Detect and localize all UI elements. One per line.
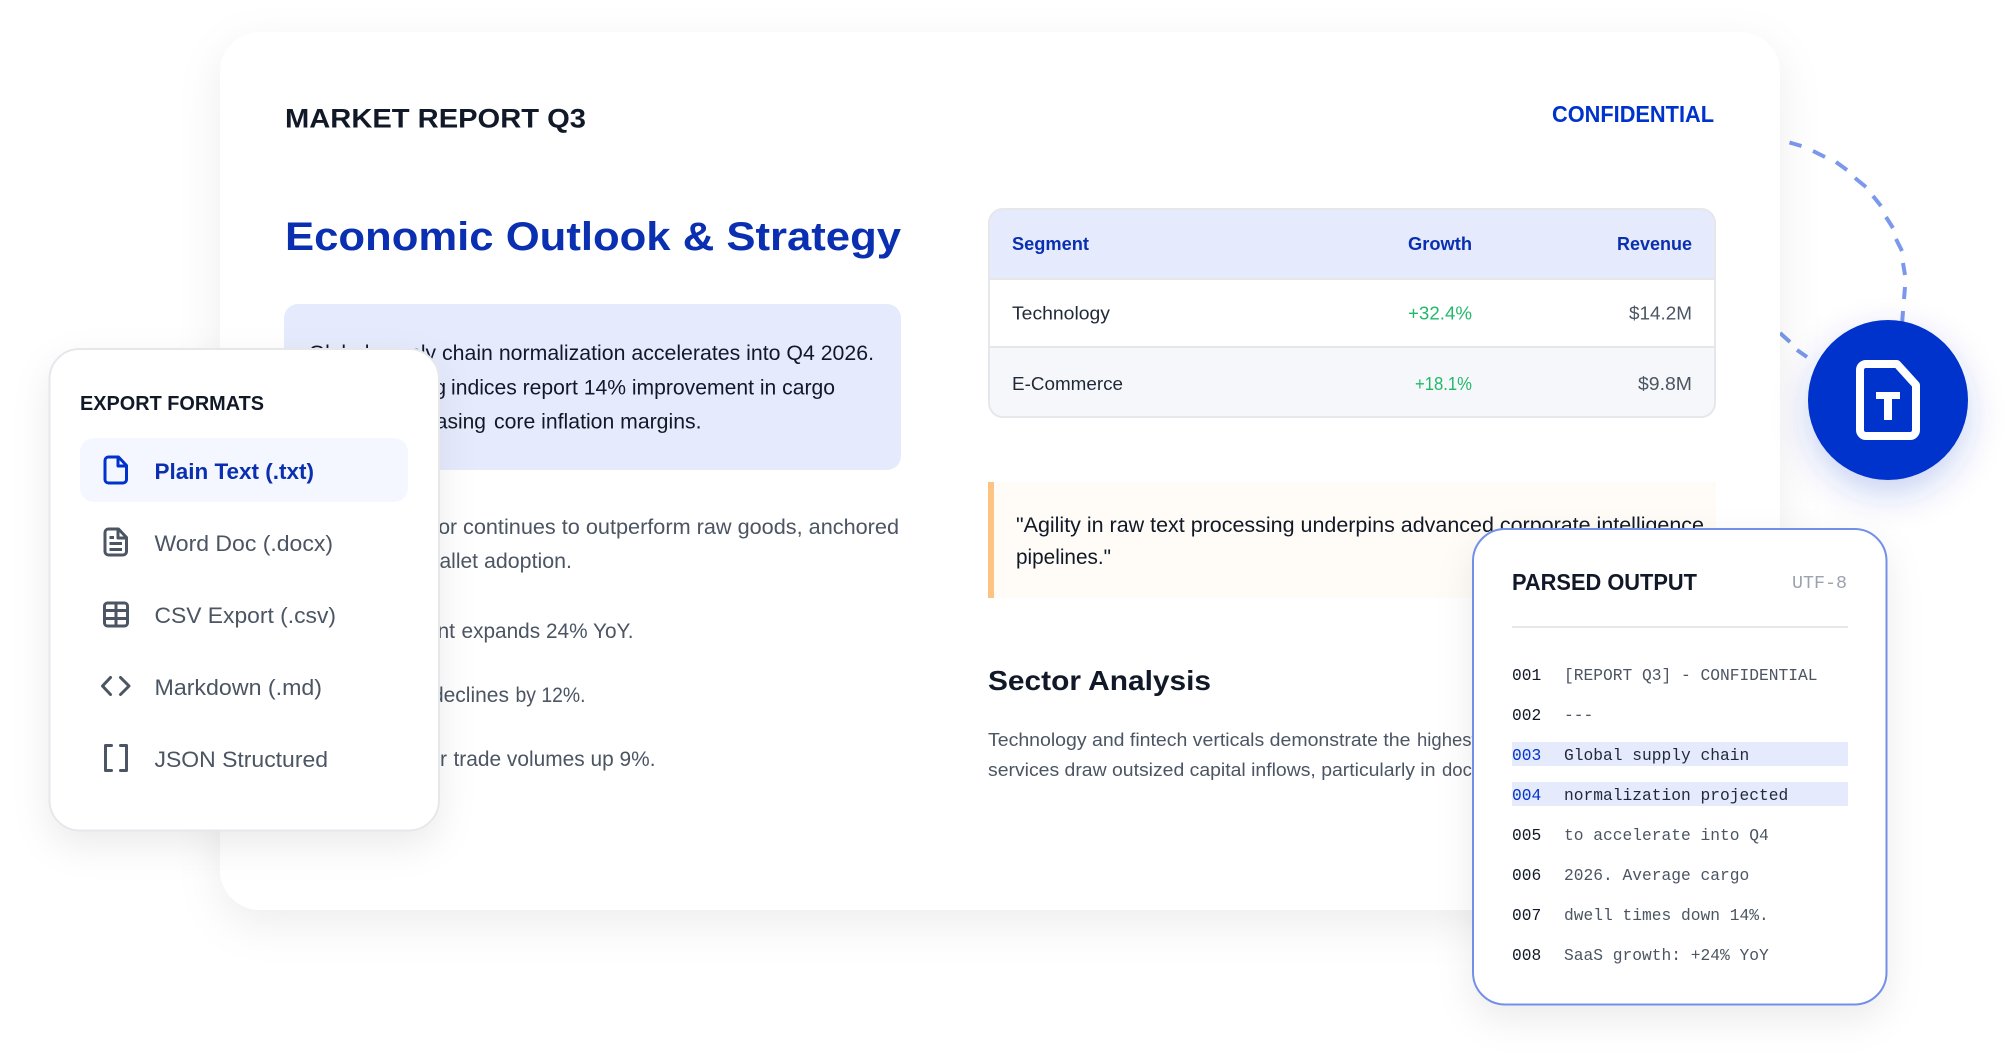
panel heading: EXPORT FORMATS <box>80 393 264 415</box>
table header row <box>1012 234 1692 254</box>
body paragraph: The services sector <box>275 516 457 539</box>
body paragraph: by digital wallet <box>336 550 478 573</box>
highlight: line 003 <box>1512 742 1848 766</box>
body paragraph: continues to outperform raw goods, anchored <box>463 516 899 539</box>
data table <box>989 209 1715 417</box>
format: json: JSON Structured <box>154 747 328 772</box>
icon: text document badge <box>1808 320 1968 480</box>
parsed lines: 004 <box>1512 786 1541 805</box>
selected format: plain text <box>80 438 408 502</box>
panel: export formats <box>50 349 439 830</box>
summary callout: indices report 14% improvement in cargo <box>451 376 835 400</box>
parsed lines: to accelerate into Q4 <box>1564 826 1769 845</box>
parsed lines: dwell times down 14%. <box>1564 906 1769 925</box>
table row: technology <box>1012 304 1692 324</box>
highlight: line 004 <box>1512 782 1848 806</box>
pull quote: "Agility in raw text processing underpins advanced corporate intelligence <box>1016 514 1704 537</box>
icon: table grid <box>104 603 128 626</box>
table row: e-commerce: E-Commerce <box>1012 374 1123 394</box>
body paragraph: adoption. <box>484 550 572 573</box>
summary callout: Global supply <box>309 342 436 365</box>
pull quote <box>988 482 1716 598</box>
bullet list <box>293 620 656 771</box>
selected format: plain text: Plain Text (.txt) <box>154 459 314 484</box>
section paragraph: documents. <box>1442 759 1538 780</box>
format: word doc: Word Doc (.docx) <box>154 531 333 556</box>
summary callout: core inflation margins. <box>494 410 702 434</box>
icon: square brackets <box>106 746 126 770</box>
parsed lines <box>1512 666 1848 965</box>
format: csv: CSV Export (.csv) <box>154 603 336 628</box>
table row: technology: +32.4% <box>1408 304 1472 324</box>
parsed lines: 008 <box>1512 946 1541 965</box>
report label: MARKET REPORT Q3 <box>285 104 586 134</box>
table header row: Segment <box>1012 234 1089 254</box>
section paragraph <box>988 729 1585 780</box>
format: markdown: Markdown (.md) <box>154 675 322 700</box>
summary callout: Average shipping <box>284 376 446 400</box>
icon: blank document <box>105 457 126 483</box>
format: word doc <box>105 529 333 556</box>
summary callout: chain normalization accelerates into Q4 2026. <box>442 342 874 365</box>
table header row: Growth <box>1408 234 1472 254</box>
panel: main report document <box>220 32 1780 910</box>
table row: e-commerce <box>1012 374 1692 394</box>
table row: e-commerce: +18.1% <box>1415 374 1472 394</box>
parsed lines: Global supply chain <box>1564 746 1749 765</box>
bullet list: expands 24% YoY. <box>462 620 634 643</box>
bullet list: trade volumes up 9%. <box>454 748 656 771</box>
panel heading: PARSED OUTPUT <box>1512 569 1697 595</box>
parsed lines: 005 <box>1512 826 1541 845</box>
bullet list: Container <box>356 748 447 771</box>
pull quote: pipelines." <box>1016 546 1111 569</box>
icon: lined document <box>105 529 126 555</box>
icon: code chevrons <box>102 678 129 694</box>
encoding label: UTF-8 <box>1792 574 1847 594</box>
parsed lines: 002 <box>1512 706 1541 725</box>
section paragraph: services draw outsized capital inflows, particularly in <box>988 759 1436 780</box>
bullet list: SaaS segment <box>317 620 455 643</box>
section paragraph: highest growth while <box>1417 729 1585 750</box>
parsed lines: 003 <box>1512 746 1541 765</box>
parsed lines: normalization projected <box>1564 786 1788 805</box>
parsed lines: 007 <box>1512 906 1541 925</box>
section heading: Sector Analysis <box>988 665 1211 696</box>
bullet list: Manufacturing declines <box>293 684 509 707</box>
table row: technology: $14.2M <box>1629 304 1692 324</box>
table row: technology: Technology <box>1012 304 1110 324</box>
table row: e-commerce: $9.8M <box>1638 374 1692 394</box>
panel: parsed output <box>1473 529 1886 1004</box>
summary callout <box>225 304 901 470</box>
dashed connector arcs <box>1780 142 1905 357</box>
body paragraph <box>275 516 899 573</box>
main title: Economic Outlook & Strategy <box>285 215 902 259</box>
parsed lines: [REPORT Q3] - CONFIDENTIAL <box>1564 666 1818 685</box>
parsed lines: 006 <box>1512 866 1541 885</box>
parsed lines: 001 <box>1512 666 1541 685</box>
section paragraph: Technology and fintech verticals demonstrate the <box>988 729 1410 750</box>
summary callout: Average dwell times, easing <box>225 410 486 434</box>
parsed lines: --- <box>1564 706 1593 725</box>
table header row: Revenue <box>1617 234 1692 254</box>
confidential tag: CONFIDENTIAL <box>1552 101 1714 127</box>
parsed lines: 2026. Average cargo <box>1564 866 1749 885</box>
parsed lines: SaaS growth: +24% YoY <box>1564 946 1769 965</box>
bullet list: by 12%. <box>516 684 586 707</box>
